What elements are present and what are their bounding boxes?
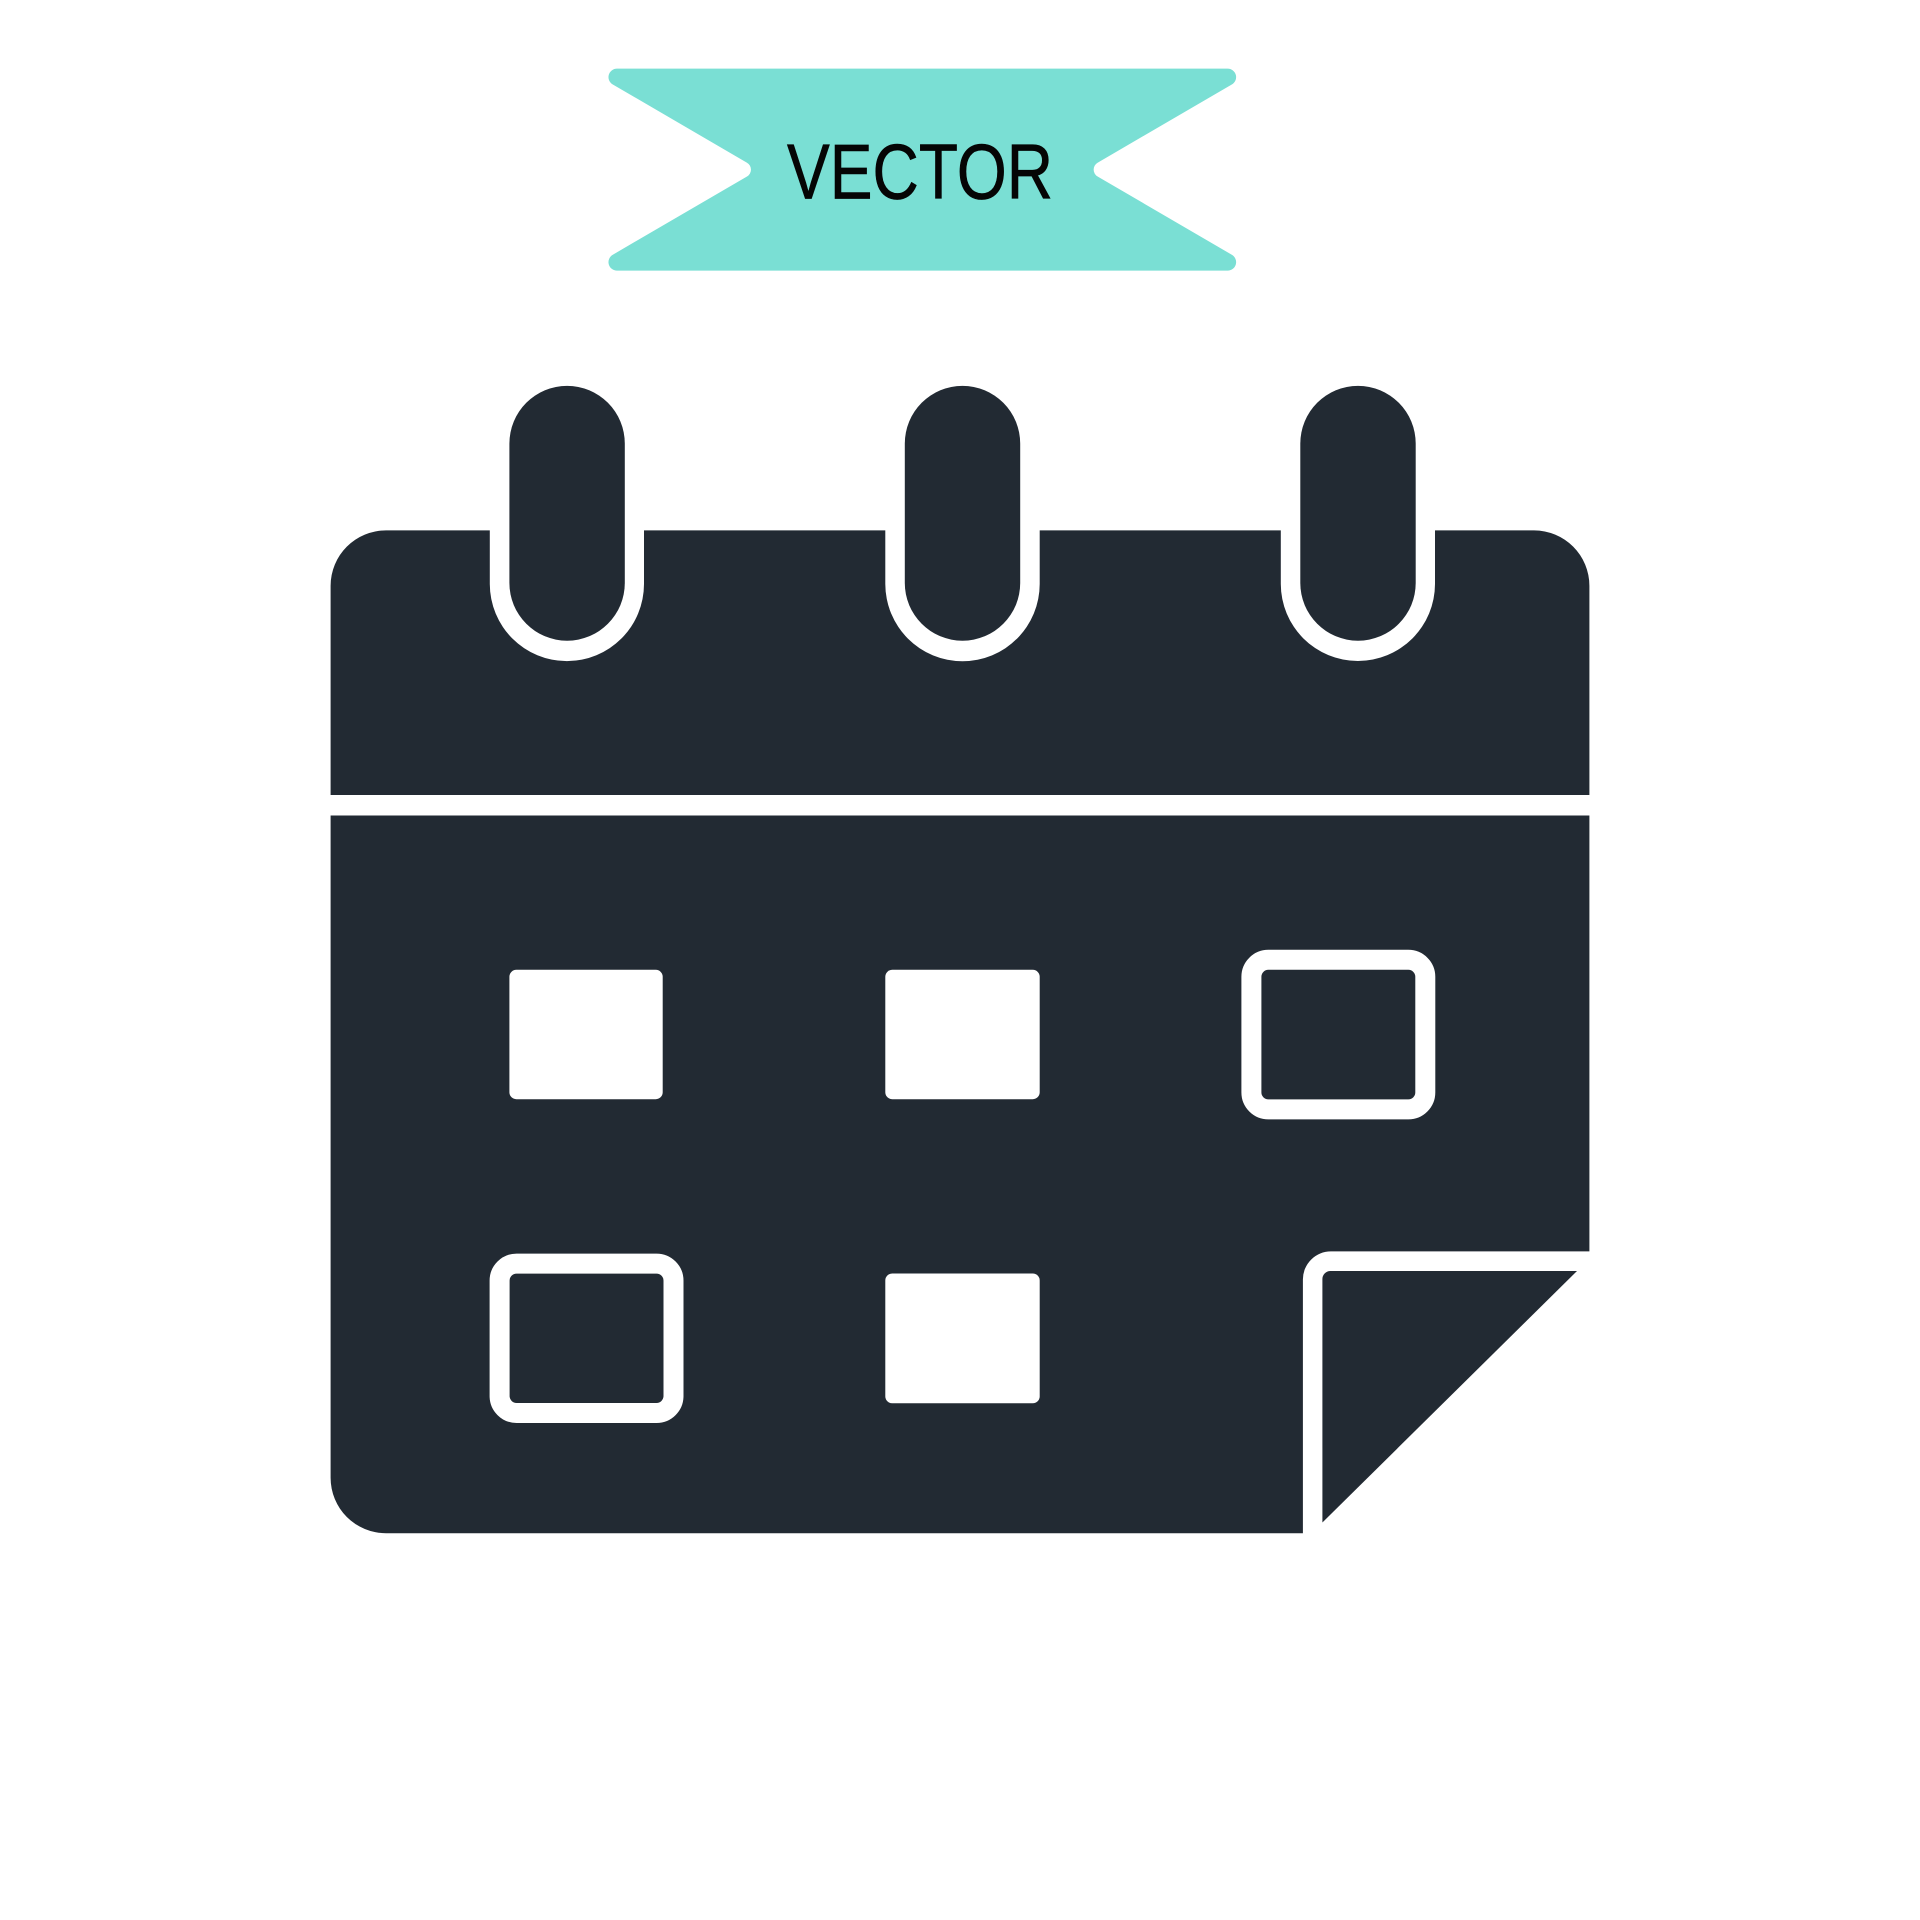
folded page corner [1322, 1271, 1577, 1522]
ribbon label: VECTOR [787, 128, 1053, 216]
icon: calendar [331, 386, 1589, 1533]
date cell row 2 column 2 [885, 1274, 1040, 1403]
date cell row 2 column 1 outlined [500, 1264, 674, 1413]
binder ring centre [905, 386, 1020, 641]
date cell row 1 column 1 [509, 970, 663, 1099]
binder ring left [509, 386, 625, 641]
binder ring right [1300, 386, 1416, 641]
calendar header band with ring slots [331, 530, 1589, 795]
ribbon shape [608, 69, 1236, 271]
date cell row 1 column 3 outlined [1251, 960, 1425, 1109]
banner: VECTOR ribbon [608, 69, 1236, 271]
date cell row 1 column 2 [885, 970, 1040, 1099]
calendar page with folded corner cut-out [331, 816, 1589, 1533]
